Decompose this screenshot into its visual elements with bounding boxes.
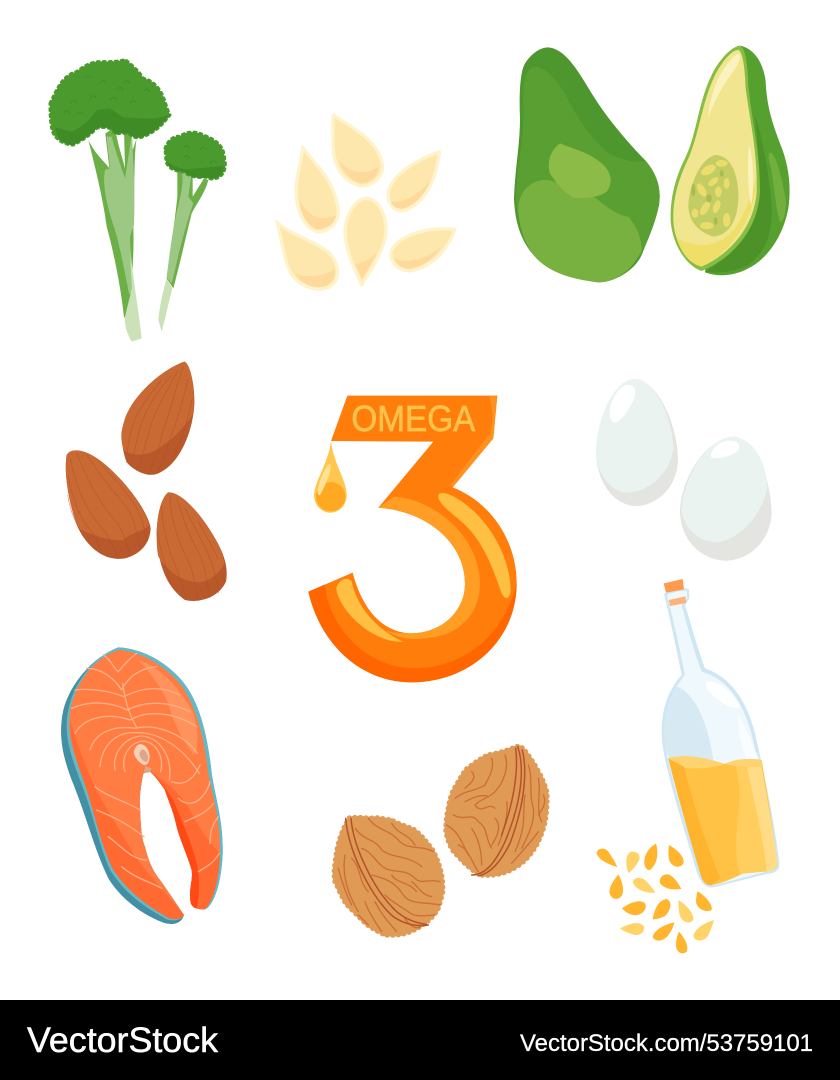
icon: walnuts (333, 745, 549, 937)
icon: avocado (514, 46, 790, 282)
banner shading (450, 396, 497, 487)
left walnut (333, 816, 444, 937)
omega label: OMEGA (351, 398, 475, 439)
right walnut (444, 745, 549, 877)
watermark brand: VectorStock (27, 1021, 219, 1060)
oil (668, 756, 777, 885)
icon: almonds (66, 362, 227, 601)
icon: broccoli (50, 59, 225, 342)
whole avocado (514, 47, 660, 282)
icon: oil bottle (662, 579, 779, 887)
watermark id: VectorStock.com/53759101 (520, 1030, 813, 1057)
icon: pumpkin seeds (277, 115, 455, 289)
base shape of 3 (308, 396, 517, 682)
icon: omega 3 number (308, 396, 517, 682)
icon: eggs (596, 379, 772, 561)
oil drop (314, 441, 347, 513)
highlights (438, 493, 511, 598)
watermark bar (0, 1000, 840, 1080)
darker lower crescent (308, 583, 517, 682)
icon: salmon steak (61, 647, 223, 924)
cut avocado (671, 46, 790, 275)
icon: flax seeds (597, 844, 714, 953)
cork (664, 579, 684, 593)
lighter inner band (373, 497, 480, 639)
